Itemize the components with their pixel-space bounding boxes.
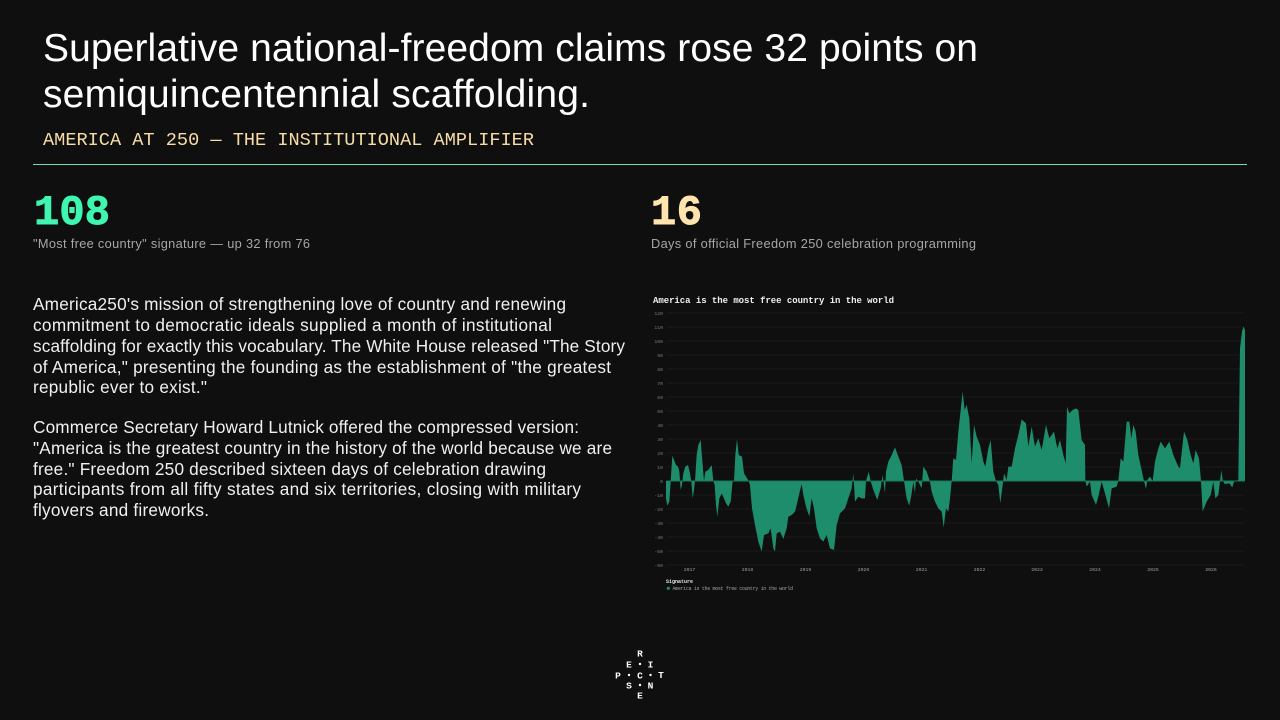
body text: paragraph one: America250's mission of strengthening love of country and renewing [33, 294, 566, 314]
x axis labels: 2023 [1031, 567, 1043, 573]
title: Superlative national-freedom claims rose 32 points on [43, 27, 978, 70]
body text: paragraph two [33, 417, 612, 520]
body text: paragraph two: free." Freedom 250 described sixteen days of celebration drawing [33, 459, 546, 479]
x axis labels: 2019 [800, 567, 811, 573]
signature area series [666, 327, 1245, 552]
title: semiquincentennial scaffolding. [43, 73, 590, 116]
y axis labels: -60 [654, 563, 663, 569]
logo: I [648, 660, 653, 670]
y axis labels: 0 [660, 479, 663, 485]
x axis labels: 2026 [1205, 567, 1217, 573]
y axis labels: 110 [654, 325, 663, 331]
y axis labels: 120 [654, 311, 663, 317]
body text: paragraph two: "America is the greatest country in the history of the world because we are [33, 438, 612, 458]
x axis labels: 2024 [1089, 567, 1101, 573]
body text: paragraph one: republic ever to exist." [33, 377, 207, 397]
body text: paragraph two: flyovers and fireworks. [33, 500, 209, 520]
logo: C [637, 670, 643, 682]
logo: S [626, 680, 632, 692]
stat: 108 signature: 108 [34, 189, 110, 237]
x axis labels: 2025 [1147, 567, 1159, 573]
stat: 108 signature [33, 189, 310, 251]
x axis labels: 2018 [742, 567, 753, 573]
x axis labels [684, 567, 1217, 573]
y axis labels: 40 [657, 423, 663, 429]
x axis labels: 2017 [684, 567, 695, 573]
stat: 16 days [651, 189, 976, 251]
chart legend [666, 579, 793, 592]
stat: 16 days: 16 [651, 189, 702, 237]
y axis labels: -50 [654, 549, 663, 555]
logo [615, 648, 664, 702]
body text: paragraph one: commitment to democratic ideals supplied a month of institutional [33, 315, 552, 335]
y axis labels: 50 [657, 409, 663, 415]
y axis labels [654, 311, 663, 569]
logo: T [658, 670, 664, 681]
y axis labels: 20 [657, 451, 663, 457]
y axis labels: 30 [657, 437, 663, 443]
x axis labels: 2020 [858, 567, 869, 573]
body text: paragraph two: participants from all fifty states and six territories, closing with military [33, 479, 581, 499]
chart legend: Signature [666, 579, 693, 585]
body text: paragraph one: scaffolding for exactly this vocabulary. The White House released "The Story [33, 336, 625, 356]
logo: R [637, 648, 643, 660]
y axis labels: -10 [654, 493, 663, 499]
x axis labels: 2022 [974, 567, 985, 573]
logo: E [626, 660, 632, 670]
body text: paragraph one [33, 294, 625, 397]
y axis labels: 100 [654, 339, 663, 345]
chart legend: America is the most free country in the world [672, 586, 793, 592]
area chart [653, 296, 1245, 592]
stat: 108 signature: "Most free country" signature — up 32 from 76 [33, 236, 310, 251]
x axis labels: 2021 [916, 567, 927, 573]
logo: P [615, 670, 621, 682]
y axis labels: -20 [654, 507, 663, 513]
subtitle: AMERICA AT 250 — THE INSTITUTIONAL AMPLIFIER [43, 130, 534, 151]
body text: paragraph one: of America," presenting the founding as the establishment of "the greatest [33, 357, 611, 377]
y axis labels: -30 [654, 521, 663, 527]
logo: N [648, 680, 654, 692]
y axis labels: 80 [657, 367, 663, 373]
body text: paragraph two: Commerce Secretary Howard Lutnick offered the compressed version: [33, 417, 579, 437]
stat: 16 days: Days of official Freedom 250 celebration programming [651, 236, 976, 251]
y axis labels: 90 [657, 353, 663, 359]
logo: E [637, 690, 643, 702]
y axis labels: 10 [657, 465, 663, 471]
y axis labels: -40 [654, 535, 663, 541]
y axis labels: 70 [657, 381, 663, 387]
chart title: America is the most free country in the world [653, 296, 894, 306]
y axis labels: 60 [657, 395, 663, 401]
title [43, 27, 978, 116]
